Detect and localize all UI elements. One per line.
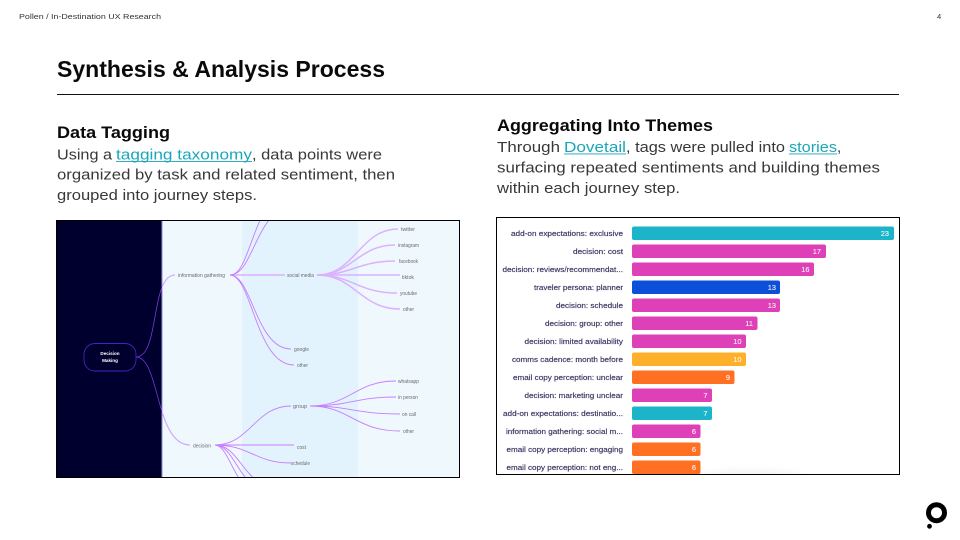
bar row: decision reviews: decision: reviews/recommendat... (502, 265, 623, 274)
panel: mind map taxonomy image: twitter (401, 227, 415, 233)
panel: mind map taxonomy image: tiktok (402, 275, 415, 281)
bar chart: tag counts (496, 218, 900, 488)
bar row: decision marketing unclear: decision: marketing unclear (524, 391, 623, 400)
panel: mind map taxonomy image: instagram (398, 243, 419, 249)
panel: mind map taxonomy image: information gathering (178, 273, 225, 279)
heading: data tagging: Data Tagging (57, 124, 170, 142)
bar row: comms cadence month before: 10 (733, 355, 742, 364)
bar row: add-on expectations destination (503, 406, 712, 420)
title: Synthesis & Analysis Process (57, 56, 385, 82)
panel: mind map taxonomy image: whatsapp (398, 379, 419, 385)
panel: mind map taxonomy image: Decision (100, 351, 120, 356)
bar row: email copy perception unclear (513, 370, 734, 384)
text block: aggregating description: , (837, 139, 841, 156)
bar row: add-on expectations destination: 7 (703, 409, 708, 418)
panel: mind map taxonomy image: other (403, 429, 414, 435)
bar row: decision reviews: 16 (801, 265, 810, 274)
bar row: information gathering social media: 6 (692, 427, 696, 436)
bar row: comms cadence month before: comms cadence: month before (512, 355, 623, 364)
text block: aggregating description: Through (497, 139, 560, 156)
bar row: decision limited availability (524, 334, 746, 348)
bar row: email copy perception engaging (506, 442, 700, 456)
bar row: decision reviews (502, 262, 814, 276)
panel: mind map taxonomy image: schedule (291, 461, 310, 467)
text block: data tagging description: organized by task and related sentiment, then (57, 166, 395, 184)
bar row: decision marketing unclear (524, 388, 712, 402)
text block: aggregating description: Dovetail (564, 139, 626, 156)
panel: mind map taxonomy image: other (403, 307, 414, 313)
bar row: decision marketing unclear: 7 (703, 391, 708, 400)
icon: pollen logo (927, 505, 944, 529)
bar row: information gathering social media: information gathering: social m... (506, 427, 623, 436)
text block: aggregating description: , tags were pulled into (626, 139, 785, 156)
bar row: traveler persona planner: 13 (768, 283, 776, 292)
bar row: decision group other: 11 (745, 319, 753, 328)
text block: aggregating description (496, 139, 880, 197)
panel: mind map taxonomy image: in person (398, 395, 418, 401)
bar row: decision group other: decision: group: other (545, 319, 624, 328)
bar row: decision schedule (556, 298, 780, 312)
heading: aggregating into themes: Aggregating Into Themes (497, 117, 713, 135)
bar row: comms cadence month before (512, 352, 746, 366)
bar row: traveler persona planner: traveler persona: planner (534, 283, 623, 292)
panel: data tagging text (57, 124, 395, 204)
panel: mind map taxonomy image: facebook (399, 259, 418, 265)
bar row: decision schedule: 13 (768, 301, 776, 310)
bar row: decision cost (573, 244, 826, 258)
panel: mind map taxonomy image: group (293, 404, 307, 410)
panel: mind map taxonomy image: Making (102, 358, 118, 363)
panel: mind map taxonomy image: cost (297, 445, 307, 451)
bar row: email copy perception not engaging: email copy perception: not eng... (506, 463, 623, 472)
panel: mind map taxonomy image: decision (193, 444, 211, 450)
bar row: decision schedule: decision: schedule (556, 301, 623, 310)
panel: mind map taxonomy image (56, 216, 460, 485)
bar row: add-on expectations exclusive (511, 226, 894, 240)
bar row: information gathering social media (506, 424, 700, 438)
panel: mind map taxonomy image: youtube (400, 291, 417, 297)
bar row: traveler persona planner (534, 280, 780, 294)
bar row: email copy perception unclear: 9 (726, 373, 730, 382)
page number: 4 (937, 12, 941, 21)
header: project name: Pollen / In-Destination UX Research (19, 12, 161, 21)
text block: aggregating description: stories (789, 139, 837, 156)
bar row: email copy perception engaging: 6 (692, 445, 696, 454)
bar row: email copy perception engaging: email copy perception: engaging (506, 445, 623, 454)
bar row: add-on expectations destination: add-on expectations: destinatio... (503, 409, 623, 418)
text block: data tagging description: tagging taxonomy (116, 146, 253, 164)
panel: mind map taxonomy image: google (294, 347, 309, 353)
bar row: email copy perception not engaging (506, 460, 700, 474)
bar row: email copy perception unclear: email copy perception: unclear (513, 373, 623, 382)
panel: aggregating into themes text (496, 117, 880, 197)
text block: data tagging description: grouped into journey steps. (57, 187, 257, 204)
text block: aggregating description: surfacing repeated sentiments and building themes (497, 160, 880, 176)
text block: aggregating description: within each journey step. (496, 180, 680, 197)
text block: data tagging description: , data points were (252, 146, 382, 164)
text block: data tagging description (57, 146, 395, 204)
bar row: decision cost: decision: cost (573, 247, 624, 256)
text block: data tagging description: Using a (57, 146, 113, 164)
bar row: email copy perception not engaging: 6 (692, 463, 696, 472)
bar row: decision limited availability: 10 (733, 337, 742, 346)
bar row: decision limited availability: decision: limited availability (524, 337, 623, 346)
panel: mind map taxonomy image: other (297, 363, 308, 369)
bar row: add-on expectations exclusive: add-on expectations: exclusive (511, 229, 623, 238)
panel: mind map taxonomy image: on call (402, 412, 416, 418)
bar row: decision cost: 17 (813, 247, 821, 256)
panel: mind map taxonomy image: social media (287, 273, 314, 279)
bar row: add-on expectations exclusive: 23 (881, 229, 889, 238)
bar row: decision group other (545, 316, 758, 330)
